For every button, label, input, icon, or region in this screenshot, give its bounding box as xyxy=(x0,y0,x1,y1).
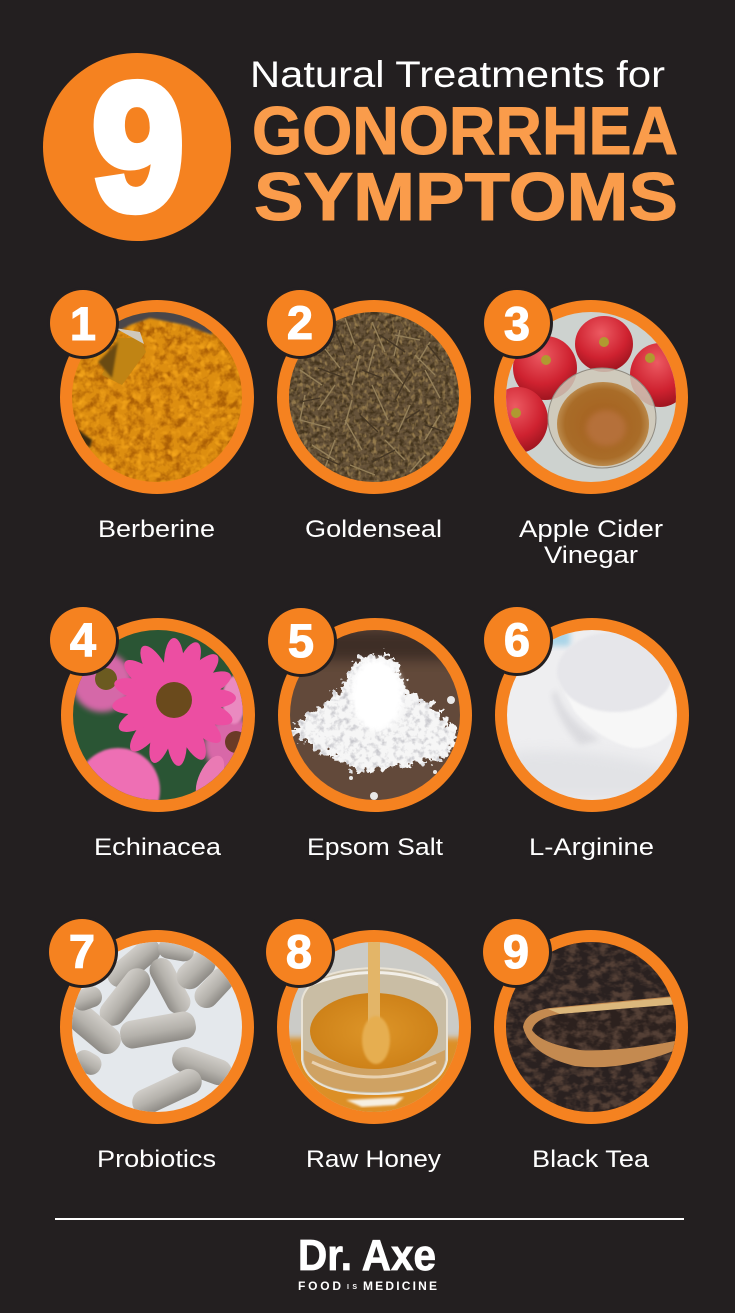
label: L-Arginine: L-Arginine xyxy=(529,834,654,861)
logo: Dr. Axe Food is Medicine: Dr. Axe xyxy=(298,1231,436,1280)
card 8: Raw Honey xyxy=(263,916,471,1173)
label: Apple Cider Vinegar: Apple Cider xyxy=(519,516,663,543)
title: Natural Treatments for xyxy=(250,54,665,95)
number badge 3: 3 xyxy=(504,297,530,350)
photo: probiotic capsules xyxy=(72,942,242,1112)
number badge 2: 2 xyxy=(287,296,313,349)
photo: white powder with scoop xyxy=(507,630,677,800)
number badge 8 xyxy=(263,916,335,988)
photo: turmeric powder xyxy=(72,308,242,482)
number badge 9 xyxy=(480,916,552,988)
card 6: L-Arginine xyxy=(481,604,689,861)
photo: salt pile on wood xyxy=(288,630,460,800)
ring 8 xyxy=(277,930,471,1124)
number badge 8: 8 xyxy=(286,925,312,978)
logo: Dr. Axe Food is Medicine: IS xyxy=(347,1284,357,1291)
logo: Dr. Axe Food is Medicine: MEDICINE xyxy=(363,1279,437,1293)
number badge 5 xyxy=(265,605,337,677)
header: big number 9 badge: 9 xyxy=(92,47,184,248)
label: Echinacea: Echinacea xyxy=(94,834,222,861)
label: Raw Honey: Raw Honey xyxy=(306,1146,441,1173)
number badge 1: 1 xyxy=(70,297,96,350)
photo: pink echinacea flower xyxy=(73,630,243,800)
title: SYMPTOMS xyxy=(254,159,678,235)
number badge 3 xyxy=(481,287,553,359)
label: Apple Cider Vinegar xyxy=(519,516,663,569)
ring 1 xyxy=(60,300,254,494)
ring 2 xyxy=(277,300,471,494)
logo: Dr. Axe Food is Medicine: FOOD xyxy=(298,1279,341,1293)
number badge 2 xyxy=(264,287,336,359)
photo: black tea in wooden spoon xyxy=(506,942,680,1112)
label: Apple Cider Vinegar: Vinegar xyxy=(544,542,638,569)
card 1: Berberine xyxy=(47,287,254,543)
card 9: Black Tea xyxy=(480,916,688,1173)
header: big number 9 badge xyxy=(43,47,231,248)
photo: honey in glass jar xyxy=(289,942,459,1112)
number badge 6: 6 xyxy=(504,613,530,666)
title: GONORRHEA xyxy=(252,93,678,169)
label: Probiotics: Probiotics xyxy=(97,1146,216,1173)
card 2: Goldenseal xyxy=(264,287,471,543)
number badge 7 xyxy=(46,916,118,988)
photo: goldenseal root xyxy=(289,312,459,482)
ring 7 xyxy=(60,930,254,1124)
title xyxy=(250,54,678,235)
ring 9 xyxy=(494,930,688,1124)
footer divider xyxy=(55,1218,684,1220)
ring 5 xyxy=(278,618,472,812)
ring 3 xyxy=(494,300,688,494)
label: Epsom Salt: Epsom Salt xyxy=(307,834,443,861)
number badge 6 xyxy=(481,604,553,676)
card 3: Apple Cider Vinegar xyxy=(481,287,690,569)
number badge 7: 7 xyxy=(69,925,95,978)
number badge 4: 4 xyxy=(70,613,96,666)
number badge 4 xyxy=(47,604,119,676)
card 4: Echinacea xyxy=(47,604,260,861)
label: Black Tea: Black Tea xyxy=(532,1146,650,1173)
number badge 1 xyxy=(47,287,119,359)
number badge 5: 5 xyxy=(288,614,314,667)
ring 4 xyxy=(61,618,255,812)
label: Berberine: Berberine xyxy=(98,516,215,543)
ring 6 xyxy=(495,618,689,812)
card 7: Probiotics xyxy=(46,916,254,1173)
label: Goldenseal: Goldenseal xyxy=(305,516,442,543)
number badge 9: 9 xyxy=(503,925,529,978)
card 5: Epsom Salt xyxy=(265,605,472,861)
photo: apples and vinegar bowl xyxy=(506,312,676,482)
